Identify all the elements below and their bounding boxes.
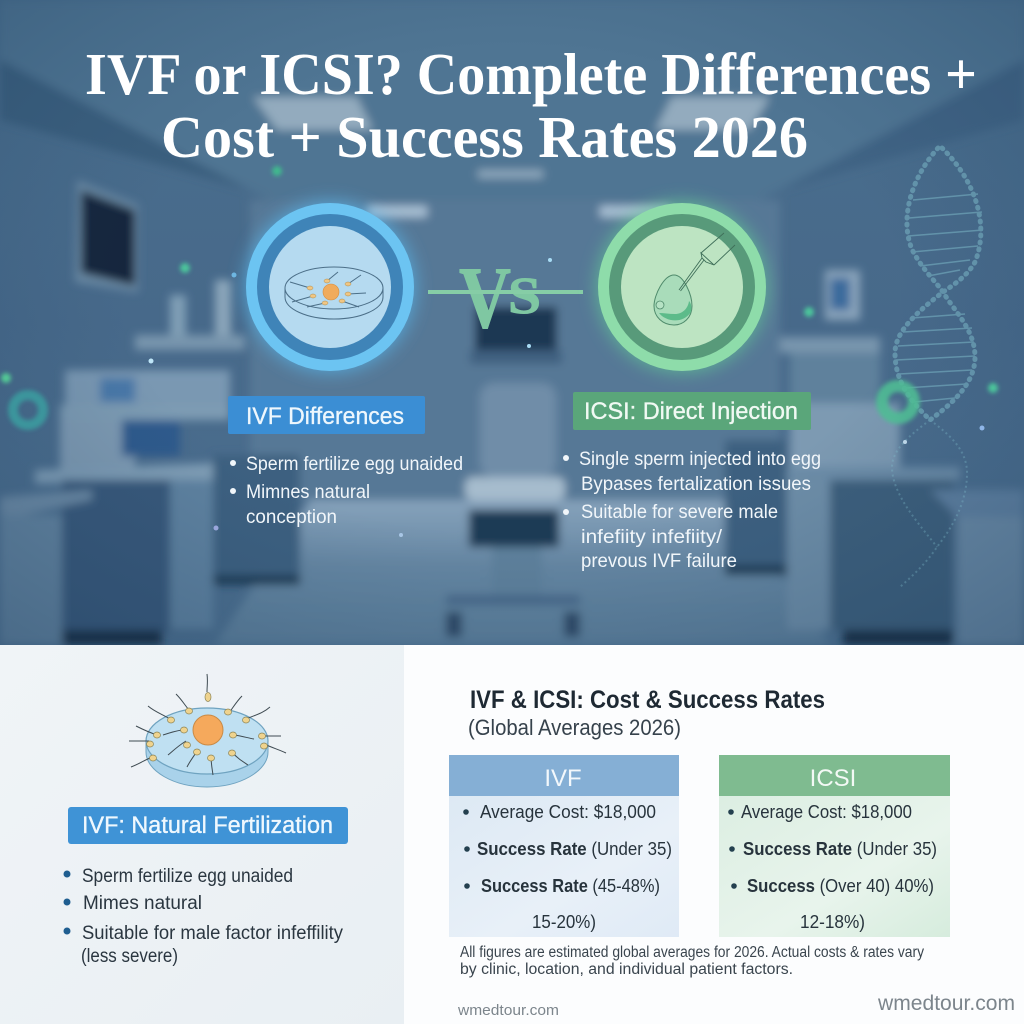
IVF heading badge bbox=[228, 396, 425, 434]
ICSI heading badge bbox=[573, 392, 811, 430]
IVF natural fertilization badge bbox=[68, 807, 348, 844]
VS divider: V bbox=[459, 250, 511, 347]
table card: IVF bbox=[449, 755, 679, 937]
icon: IVF petri dish circle bbox=[245, 202, 415, 372]
cost heading: (Global Averages 2026) bbox=[468, 715, 681, 740]
table card: ICSI: 12-18%) bbox=[800, 912, 865, 932]
natural fertilization bullet list: (less severe) bbox=[81, 946, 178, 967]
table card: IVF: Success Rate (Under 35) bbox=[477, 839, 672, 859]
natural fertilization bullet list: Sperm fertilize egg unaided bbox=[82, 866, 293, 887]
cost heading: IVF & ICSI: Cost & Success Rates bbox=[470, 686, 825, 714]
ICSI bullet list: infefiity infefiity/ bbox=[581, 526, 723, 548]
icon: petri dish with sperm around egg bbox=[129, 674, 286, 787]
title bbox=[85, 41, 977, 170]
title: IVF or ICSI? Complete Differences + bbox=[85, 41, 977, 107]
ICSI bullet list: Bypases fertalization issues bbox=[581, 473, 811, 495]
IVF bullet list: Sperm fertilize egg unaided bbox=[246, 453, 463, 475]
table card: IVF: Success Rate (45-48%) bbox=[481, 876, 660, 896]
ICSI bullet list: Single sperm injected into egg bbox=[579, 448, 821, 470]
table card: IVF: IVF bbox=[544, 765, 582, 792]
glowing rings and dots bbox=[1, 166, 998, 537]
IVF bullet list: conception bbox=[246, 506, 337, 528]
disclaimer note: by clinic, location, and individual patient factors. bbox=[460, 961, 793, 978]
footer brand left: wmedtour.com bbox=[457, 1002, 559, 1019]
IVF heading badge: IVF Differences bbox=[246, 403, 404, 430]
IVF natural fertilization badge: IVF: Natural Fertilization bbox=[82, 812, 333, 839]
ICSI bullet list: Suitable for severe male bbox=[581, 501, 778, 523]
footer brand right: wmedtour.com bbox=[877, 992, 1015, 1015]
VS divider bbox=[428, 250, 583, 347]
IVF bullet list: Mimnes natural bbox=[246, 481, 370, 503]
ICSI bullet list: prevous IVF failure bbox=[581, 550, 737, 572]
icon: ICSI injection circle bbox=[597, 202, 767, 372]
IVF bullet list bbox=[230, 453, 463, 528]
disclaimer note: All figures are estimated global averages for 2026. Actual costs & rates vary bbox=[460, 944, 924, 961]
table card: IVF: 15-20%) bbox=[532, 912, 596, 932]
table card: ICSI: Success Rate (Under 35) bbox=[743, 839, 937, 859]
panel: cost and success rates bbox=[404, 645, 1024, 1024]
table card: IVF: Average Cost: $18,000 bbox=[480, 802, 656, 822]
natural fertilization bullet list: Suitable for male factor infeffility bbox=[82, 923, 343, 944]
background: blurred laboratory scene bbox=[0, 0, 1024, 645]
disclaimer note bbox=[460, 944, 924, 978]
ICSI heading badge: ICSI: Direct Injection bbox=[584, 398, 798, 425]
table card: ICSI: Average Cost: $18,000 bbox=[741, 802, 912, 822]
natural fertilization bullet list bbox=[64, 866, 343, 967]
table card: ICSI: ICSI bbox=[810, 765, 856, 792]
VS divider: S bbox=[508, 268, 541, 325]
panel: IVF natural fertilization bbox=[0, 645, 404, 1024]
ICSI bullet list bbox=[563, 448, 821, 572]
title: Cost + Success Rates 2026 bbox=[161, 104, 808, 170]
natural fertilization bullet list: Mimes natural bbox=[83, 893, 202, 914]
cost heading bbox=[468, 686, 825, 740]
table card: ICSI: Success (Over 40) 40%) bbox=[747, 876, 934, 896]
icon: DNA helix bbox=[892, 148, 983, 587]
table card: ICSI bbox=[719, 755, 950, 937]
